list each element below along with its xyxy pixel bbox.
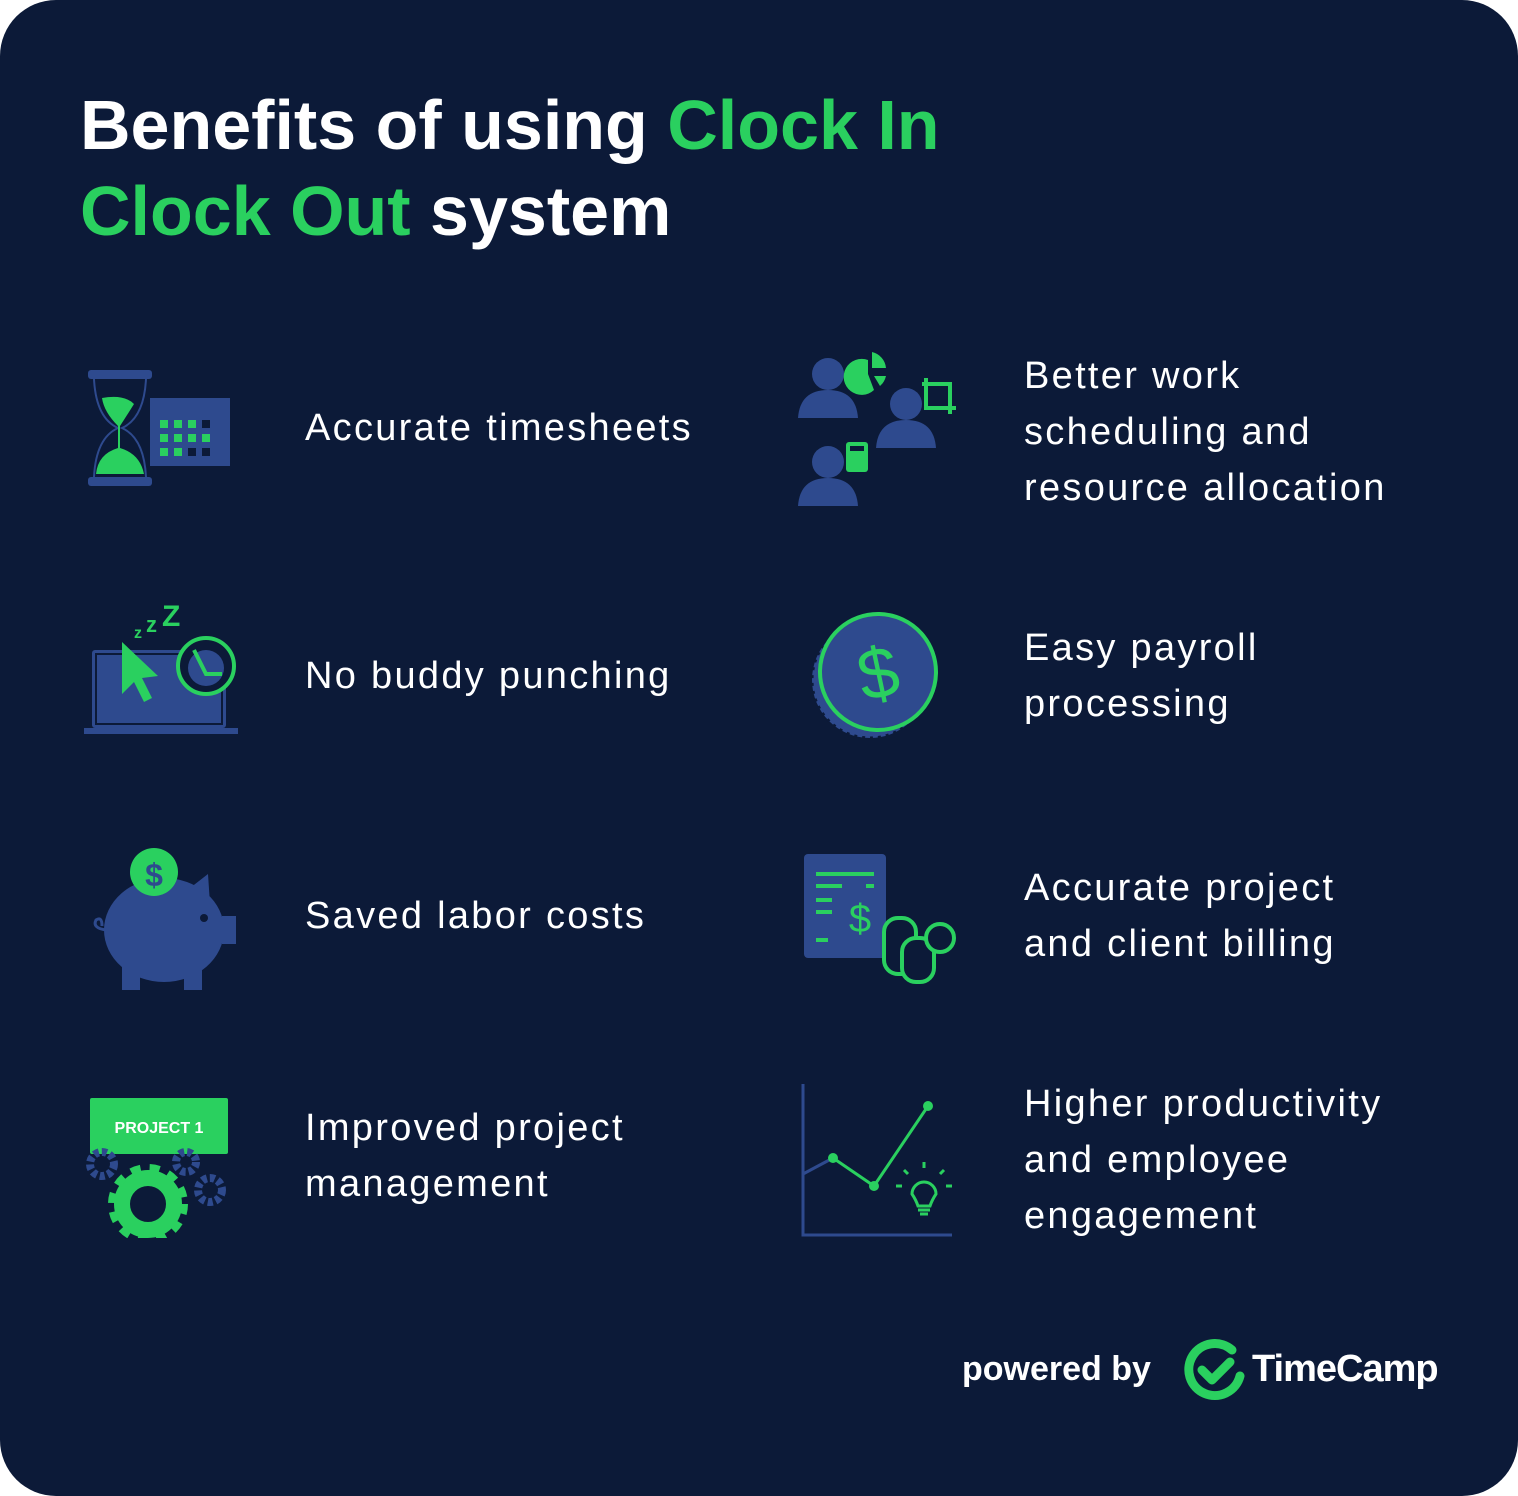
icon: piggy bank <box>94 848 236 990</box>
text: easy payroll: Easy payroll <box>1024 627 1259 669</box>
footer: powered by TimeCamp: TimeCamp <box>1252 1348 1438 1390</box>
text: easy payroll <box>1024 627 1259 725</box>
title: Benefits of using Clock In <box>80 86 940 164</box>
icon: hourglass calendar <box>88 370 230 486</box>
text: project billing <box>1024 867 1336 965</box>
icon: people scheduling <box>798 352 956 506</box>
icon: laptop sleeping clock: z <box>134 625 142 642</box>
text: improved project management <box>305 1107 625 1205</box>
title <box>80 86 940 250</box>
text: higher productivity: and employee <box>1024 1139 1290 1181</box>
icon: TimeCamp logo <box>1184 1339 1244 1400</box>
text: improved project management: management <box>305 1163 550 1205</box>
text: saved labor costs: Saved labor costs <box>305 895 646 937</box>
text: higher productivity: Higher productivity <box>1024 1083 1382 1125</box>
text: easy payroll: processing <box>1024 683 1231 725</box>
text: improved project management: Improved project <box>305 1107 625 1149</box>
icon: invoice coins: $ <box>849 897 871 941</box>
icon: invoice coins <box>804 854 956 984</box>
text: no buddy punching: No buddy punching <box>305 655 672 697</box>
text: accurate timesheets: Accurate timesheets <box>305 407 693 449</box>
footer: powered by TimeCamp: powered by <box>962 1350 1151 1388</box>
icon: chart lightbulb <box>802 1084 952 1236</box>
text: better scheduling <box>1024 355 1387 509</box>
text: better scheduling: resource allocation <box>1024 467 1387 509</box>
title: Clock Out system <box>80 172 671 250</box>
icon: laptop sleeping clock: z <box>146 612 157 637</box>
icon: project gears <box>86 1098 228 1238</box>
text: project billing: and client billing <box>1024 923 1336 965</box>
text: better scheduling: Better work <box>1024 355 1241 397</box>
icon: piggy bank: $ <box>145 857 163 893</box>
text: higher productivity: engagement <box>1024 1195 1258 1237</box>
footer: powered by TimeCamp <box>962 1339 1438 1400</box>
text: better scheduling: scheduling and <box>1024 411 1312 453</box>
text: project billing: Accurate project <box>1024 867 1335 909</box>
icon: laptop sleeping clock <box>84 602 238 734</box>
text: higher productivity <box>1024 1083 1382 1237</box>
icon: project gears: PROJECT 1 <box>115 1120 204 1137</box>
icon: coin: $ <box>851 631 906 717</box>
icon: coin <box>812 612 938 738</box>
